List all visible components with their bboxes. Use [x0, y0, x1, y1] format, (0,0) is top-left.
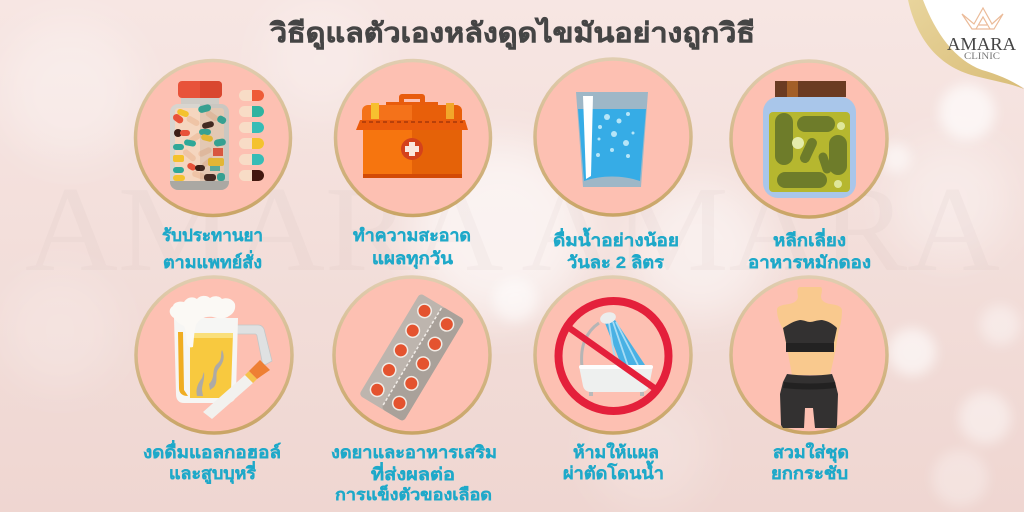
watermark: AMARA AMARA — [25, 162, 1000, 297]
panel: avoid pickled food — [731, 61, 887, 272]
label — [563, 442, 664, 483]
icon: beer mug and cigarette — [170, 296, 272, 419]
panel: compression garment — [731, 277, 887, 483]
title: วิธีดูแลตัวเองหลังดูดไขมันอย่างถูกวิธี — [269, 17, 755, 50]
capsules — [239, 90, 264, 181]
label — [353, 226, 471, 269]
icon: blister pack — [359, 293, 465, 422]
icon: prohibition sign — [558, 301, 668, 411]
panel: no alcohol or smoking — [136, 277, 292, 485]
label: การแข็งตัวของเลือด — [335, 483, 492, 504]
panel: keep wound dry — [535, 277, 691, 483]
label: และสูบบุหรี่ — [169, 461, 257, 485]
label: ยกกระชับ — [771, 464, 848, 483]
panel: clean wound — [336, 60, 490, 269]
icon: pill bottle — [170, 81, 264, 190]
label: หลีกเลี่ยง — [773, 228, 846, 250]
label: รับประทานยา — [162, 226, 263, 245]
label: ตามแพทย์สั่ง — [163, 250, 262, 272]
label — [143, 440, 281, 485]
label: ผ่าตัดโดนน้ำ — [563, 460, 664, 483]
icon: shower and bathtub — [558, 301, 668, 411]
icon: torso in compression garment — [777, 287, 842, 428]
icon: first aid box — [356, 94, 468, 178]
panel: no blood thinning drugs — [331, 277, 497, 504]
label: ทำความสะอาด — [353, 226, 471, 245]
label: อาหารหมักดอง — [748, 253, 871, 272]
label: งดยาและอาหารเสริม — [331, 443, 497, 462]
panel: take medication — [136, 60, 290, 272]
label: แผลทุกวัน — [372, 249, 453, 269]
logo crown — [962, 8, 1003, 29]
label — [162, 226, 263, 272]
label: งดดื่มแอลกอฮอล์ — [143, 440, 281, 462]
icon: pickle jar — [763, 81, 856, 198]
logo subtitle: CLINIC — [964, 51, 1000, 61]
icon: glass of water — [576, 92, 648, 187]
label — [771, 442, 849, 483]
label: ห้ามให้แผล — [573, 442, 659, 462]
label — [331, 443, 497, 504]
label: ที่ส่งผลต่อ — [371, 462, 455, 484]
label — [748, 228, 871, 272]
label — [553, 227, 679, 272]
logo corner — [908, 0, 1024, 89]
logo wordmark: AMARA — [947, 34, 1016, 54]
label: สวมใส่ชุด — [773, 442, 849, 463]
label: ดื่มน้ำอย่างน้อย — [553, 227, 679, 250]
panel: drink water — [535, 59, 691, 272]
label: วันละ 2 ลิตร — [567, 253, 665, 272]
